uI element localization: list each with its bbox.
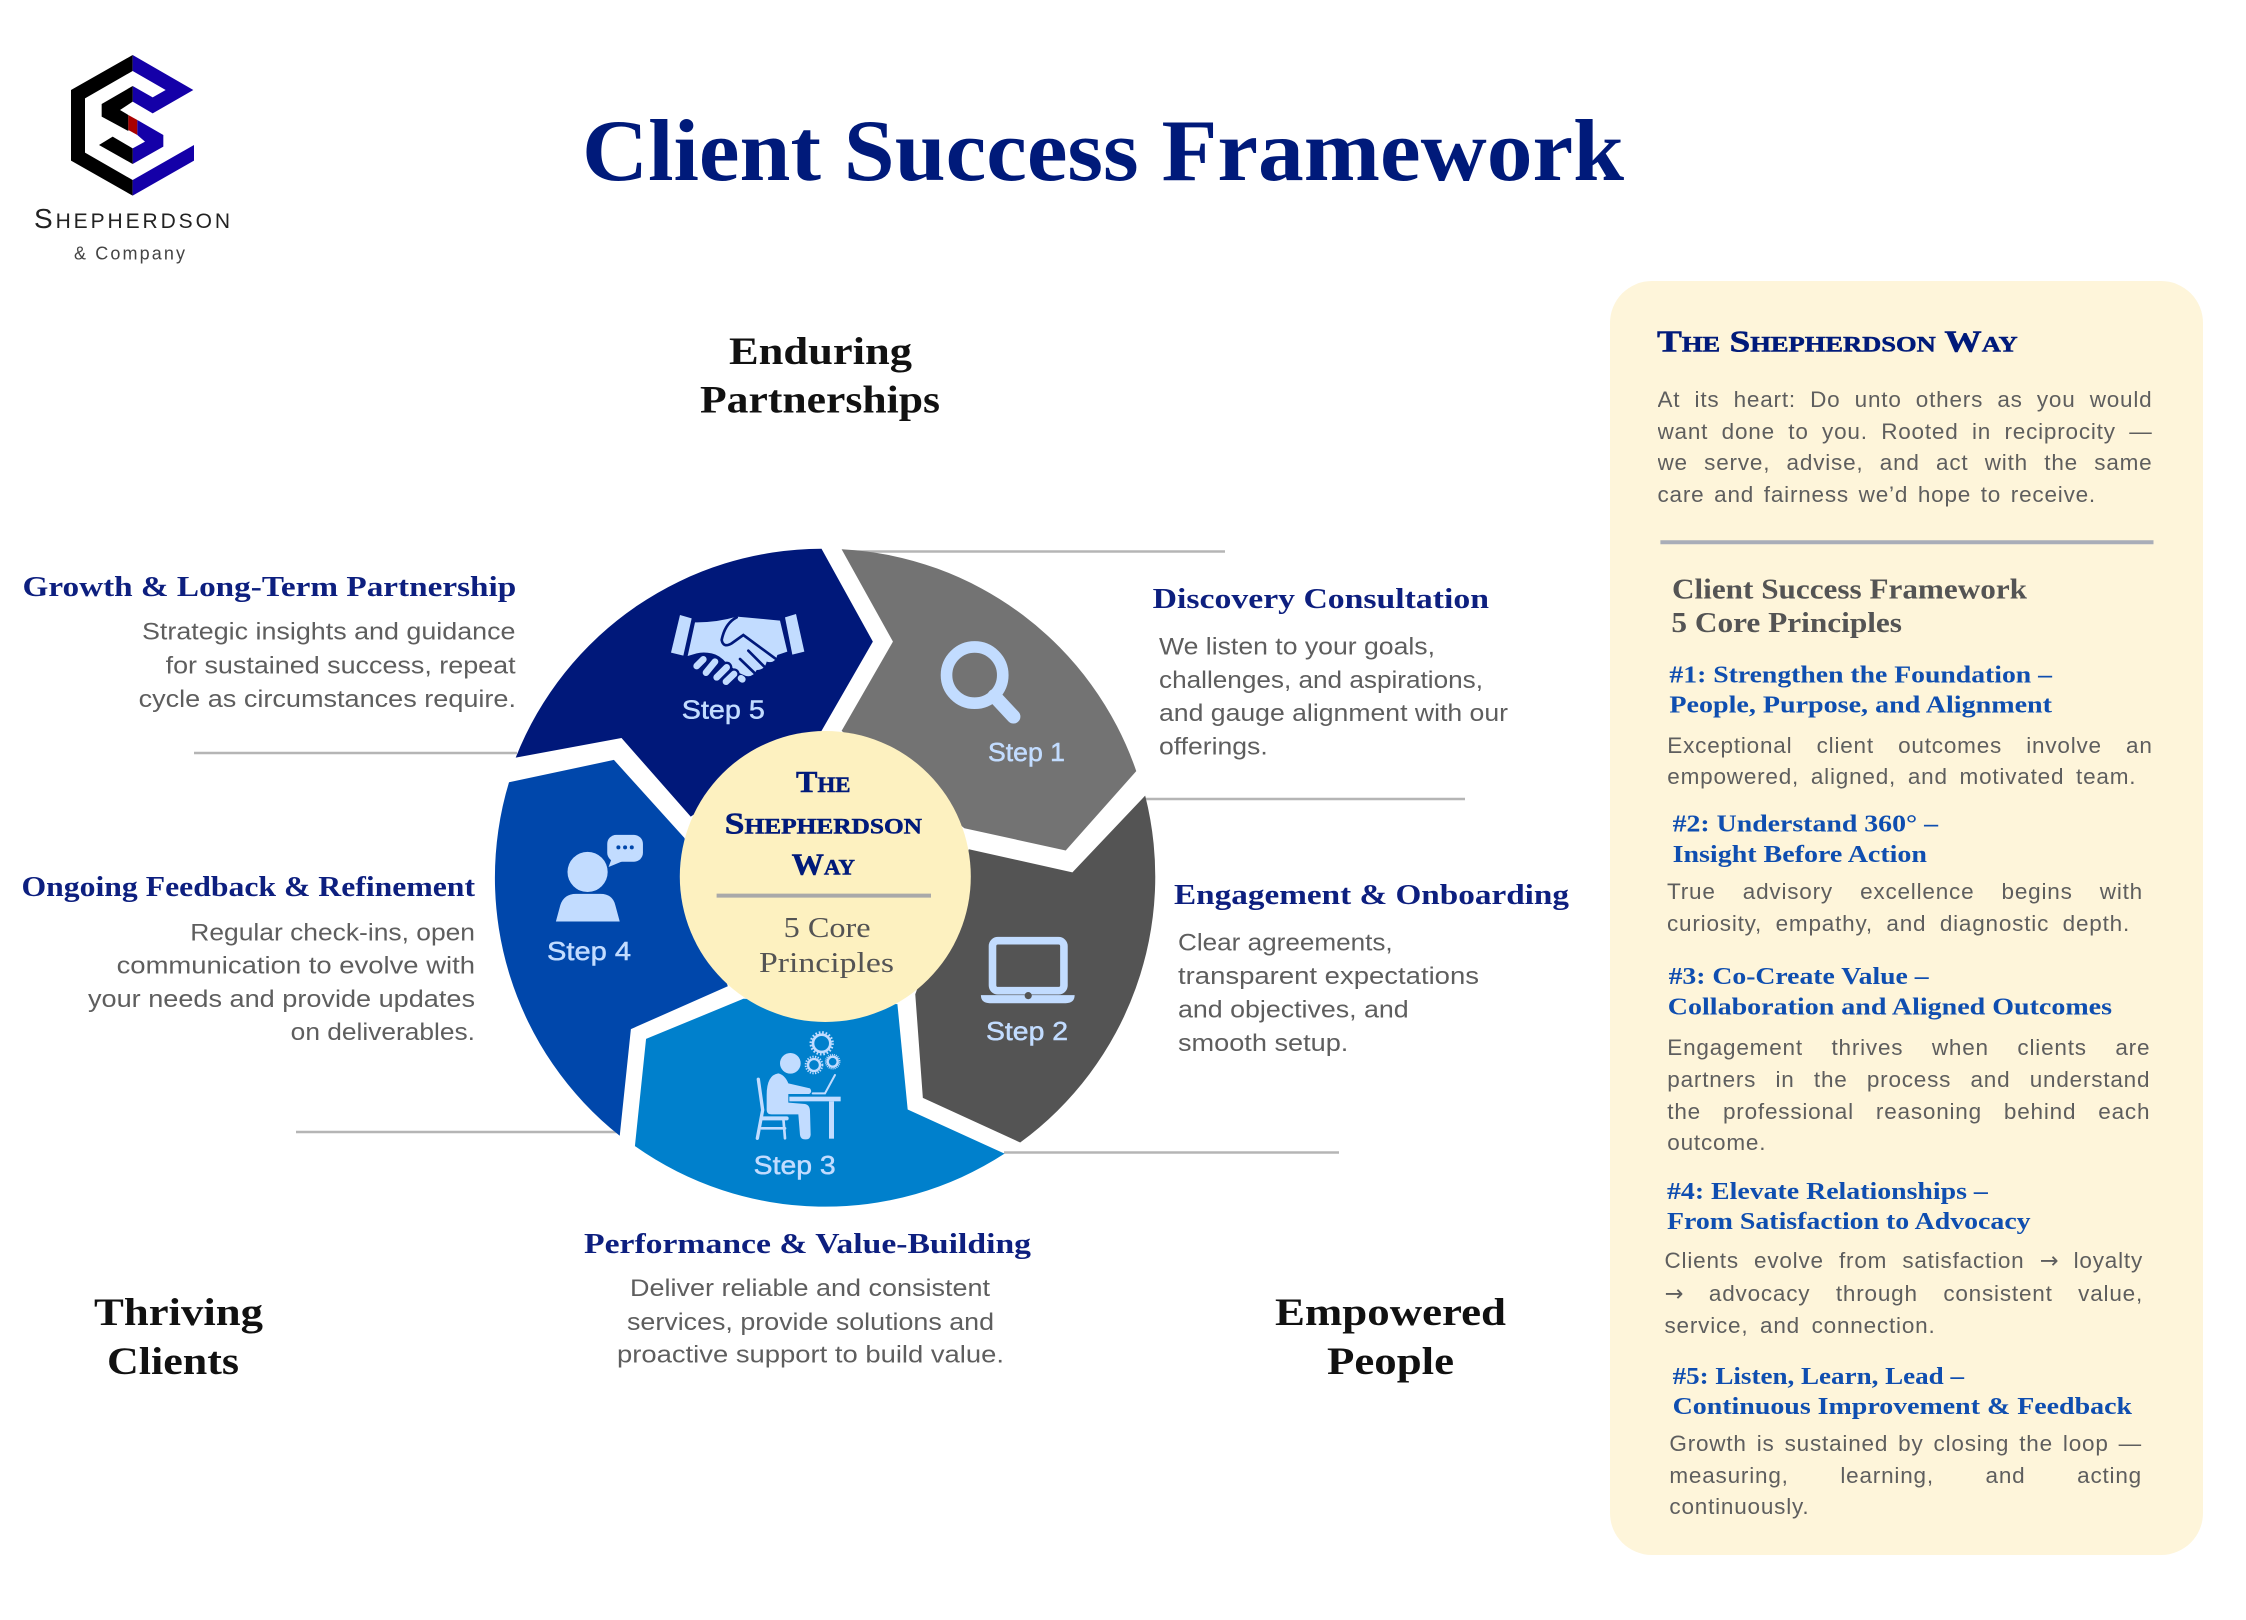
step labels: Step 2	[986, 1016, 1068, 1046]
center circle: Way	[792, 847, 855, 882]
principle 2: curiosity, empathy, and diagnostic depth.	[1667, 911, 2130, 936]
step 3 label: Performance & Value-Building	[584, 1229, 1031, 1369]
center circle: The	[796, 764, 850, 799]
principle 3: Engagement thrives when clients are	[1667, 1035, 2150, 1060]
principle 5: Growth is sustained by closing the loop —	[1669, 1431, 2142, 1456]
step labels: Step 4	[547, 936, 631, 966]
principle 1: empowered, aligned, and motivated team.	[1667, 764, 2136, 789]
icon: handshake	[671, 614, 804, 682]
heading: Empowered People	[1275, 1291, 1506, 1383]
segment: step 2	[915, 796, 1155, 1143]
heading: Thriving Clients: Clients	[107, 1340, 239, 1383]
step 4 label: Ongoing Feedback & Refinement: Ongoing Feedback & Refinement	[22, 872, 476, 903]
principle 1	[1667, 661, 2177, 796]
step 1 label: Discovery Consultation: challenges, and aspirations,	[1159, 667, 1483, 694]
heading: Enduring Partnerships	[700, 330, 940, 422]
center circle: Principles	[759, 947, 894, 979]
principle 2	[1667, 811, 2177, 942]
step 2 label: Engagement & Onboarding: transparent expectations	[1178, 963, 1479, 990]
heading: Enduring Partnerships: Partnerships	[700, 379, 940, 422]
step 5 label: Growth & Long-Term Partnership: Strategic insights and guidance	[142, 619, 516, 646]
segment: step 4	[495, 760, 728, 1136]
step 3 label: Performance & Value-Building: services, provide solutions and	[627, 1309, 994, 1336]
icon: laptop	[981, 941, 1075, 1003]
step labels: Step 3	[754, 1150, 836, 1180]
step labels: Step 5	[682, 694, 765, 724]
step labels: Step 1	[988, 737, 1065, 767]
principle 1: Exceptional client outcomes involve an	[1667, 733, 2153, 758]
step 3 label: Performance & Value-Building: Performance & Value-Building	[584, 1229, 1031, 1260]
heading: Empowered People: People	[1327, 1340, 1454, 1383]
step 1 label: Discovery Consultation: and gauge alignment with our	[1159, 700, 1508, 727]
center circle: Shepherdson	[725, 806, 922, 841]
principle 2: Insight Before Action	[1673, 841, 1927, 868]
step 5 label: Growth & Long-Term Partnership	[22, 572, 516, 713]
principle 4: → advocacy through consistent value,	[1664, 1280, 2143, 1306]
panel: The Shepherdson Way	[1610, 281, 2203, 1555]
panel heading: The Shepherdson Way	[1657, 324, 2018, 358]
icon: magnifying glass	[947, 647, 1013, 717]
principle 5: measuring, learning, and acting	[1669, 1463, 2142, 1488]
principle 5: #5: Listen, Learn, Lead –	[1673, 1363, 1965, 1390]
principle 4: From Satisfaction to Advocacy	[1667, 1208, 2031, 1235]
principle 4: Clients evolve from satisfaction → loyalty	[1664, 1248, 2143, 1274]
heading: Thriving Clients: Thriving	[94, 1291, 264, 1334]
panel intro text: At its heart: Do unto others as you would	[1658, 387, 2152, 412]
step 3 label: Performance & Value-Building: proactive support to build value.	[617, 1342, 1004, 1369]
panel intro text: care and fairness we’d hope to receive.	[1658, 482, 2096, 507]
step 4 label: Ongoing Feedback & Refinement: Regular check-ins, open	[190, 920, 475, 946]
step 1 label: Discovery Consultation: offerings.	[1159, 734, 1268, 761]
panel intro text: we serve, advise, and act with the same	[1658, 450, 2152, 475]
step 4 label: Ongoing Feedback & Refinement: communication to evolve with	[117, 953, 475, 980]
center circle: 5 Core	[784, 912, 871, 944]
principle 2: #2: Understand 360° –	[1673, 811, 1939, 838]
principle 3: #3: Co-Create Value –	[1669, 963, 1929, 990]
principle 5: Continuous Improvement & Feedback	[1673, 1393, 2132, 1420]
step 2 label: Engagement & Onboarding	[1174, 880, 1569, 1057]
heading: Enduring Partnerships: Enduring	[729, 330, 913, 373]
principle 3: Collaboration and Aligned Outcomes	[1668, 993, 2112, 1020]
step 4 label: Ongoing Feedback & Refinement	[22, 872, 476, 1046]
step 1 label: Discovery Consultation: Discovery Consultation	[1153, 584, 1489, 615]
step 1 label: Discovery Consultation: We listen to your goals,	[1159, 633, 1435, 660]
step 1 label: Discovery Consultation	[1153, 584, 1508, 761]
step 5 label: Growth & Long-Term Partnership: cycle as circumstances require.	[139, 686, 516, 713]
heading: Thriving Clients	[94, 1291, 264, 1383]
heading: Empowered People: Empowered	[1275, 1291, 1506, 1334]
cycle wheel	[495, 549, 1155, 1207]
step 4 label: Ongoing Feedback & Refinement: your needs and provide updates	[88, 986, 475, 1013]
principle 4	[1664, 1178, 2174, 1343]
segment: step 1	[842, 549, 1136, 851]
step 2 label: Engagement & Onboarding: Clear agreements,	[1178, 930, 1393, 957]
step 4 label: Ongoing Feedback & Refinement: on deliverables.	[291, 1019, 475, 1046]
principle 1: #1: Strengthen the Foundation –	[1669, 661, 2053, 688]
logo wordmark: SHEPHERDSON	[34, 203, 230, 234]
step 5 label: Growth & Long-Term Partnership: Growth & Long-Term Partnership	[22, 572, 516, 603]
panel intro text	[1658, 384, 2178, 514]
center circle	[680, 731, 971, 1022]
step 2 label: Engagement & Onboarding: and objectives, and	[1178, 997, 1409, 1024]
segment: step 5	[516, 549, 873, 817]
principle 4: #4: Elevate Relationships –	[1667, 1178, 1989, 1205]
principle 3: the professional reasoning behind each	[1667, 1099, 2150, 1124]
panel subheading: Client Success Framework	[1672, 574, 2028, 606]
logo sub-line: & Company	[74, 243, 185, 263]
panel intro text: want done to you. Rooted in reciprocity —	[1658, 419, 2152, 444]
principle 1: People, Purpose, and Alignment	[1669, 691, 2053, 718]
step 2 label: Engagement & Onboarding: Engagement & Onboarding	[1174, 880, 1569, 911]
icon: person working at desk with gears	[757, 1032, 841, 1139]
principle 3: outcome.	[1667, 1130, 1766, 1155]
principle 5	[1669, 1363, 2179, 1526]
step 5 label: Growth & Long-Term Partnership: for sustained success, repeat	[166, 652, 516, 679]
principle 3: partners in the process and understand	[1667, 1067, 2150, 1092]
principle 5: continuously.	[1669, 1494, 1809, 1519]
icon: person with speech bubble	[556, 835, 643, 922]
title: Client Success Framework	[582, 103, 1624, 200]
panel subheading: 5 Core Principles	[1671, 607, 1902, 639]
logo: Shepherdson & Company	[34, 55, 230, 263]
segment: step 3	[635, 999, 1005, 1207]
principle 4: service, and connection.	[1664, 1313, 1936, 1338]
step 3 label: Performance & Value-Building: Deliver reliable and consistent	[630, 1275, 990, 1302]
logo mark: hexagonal S	[71, 55, 194, 196]
principle 3	[1667, 963, 2177, 1162]
step 2 label: Engagement & Onboarding: smooth setup.	[1178, 1030, 1348, 1057]
panel subheading	[1671, 574, 2028, 639]
principle 2: True advisory excellence begins with	[1667, 879, 2143, 904]
step labels	[547, 694, 1068, 1180]
